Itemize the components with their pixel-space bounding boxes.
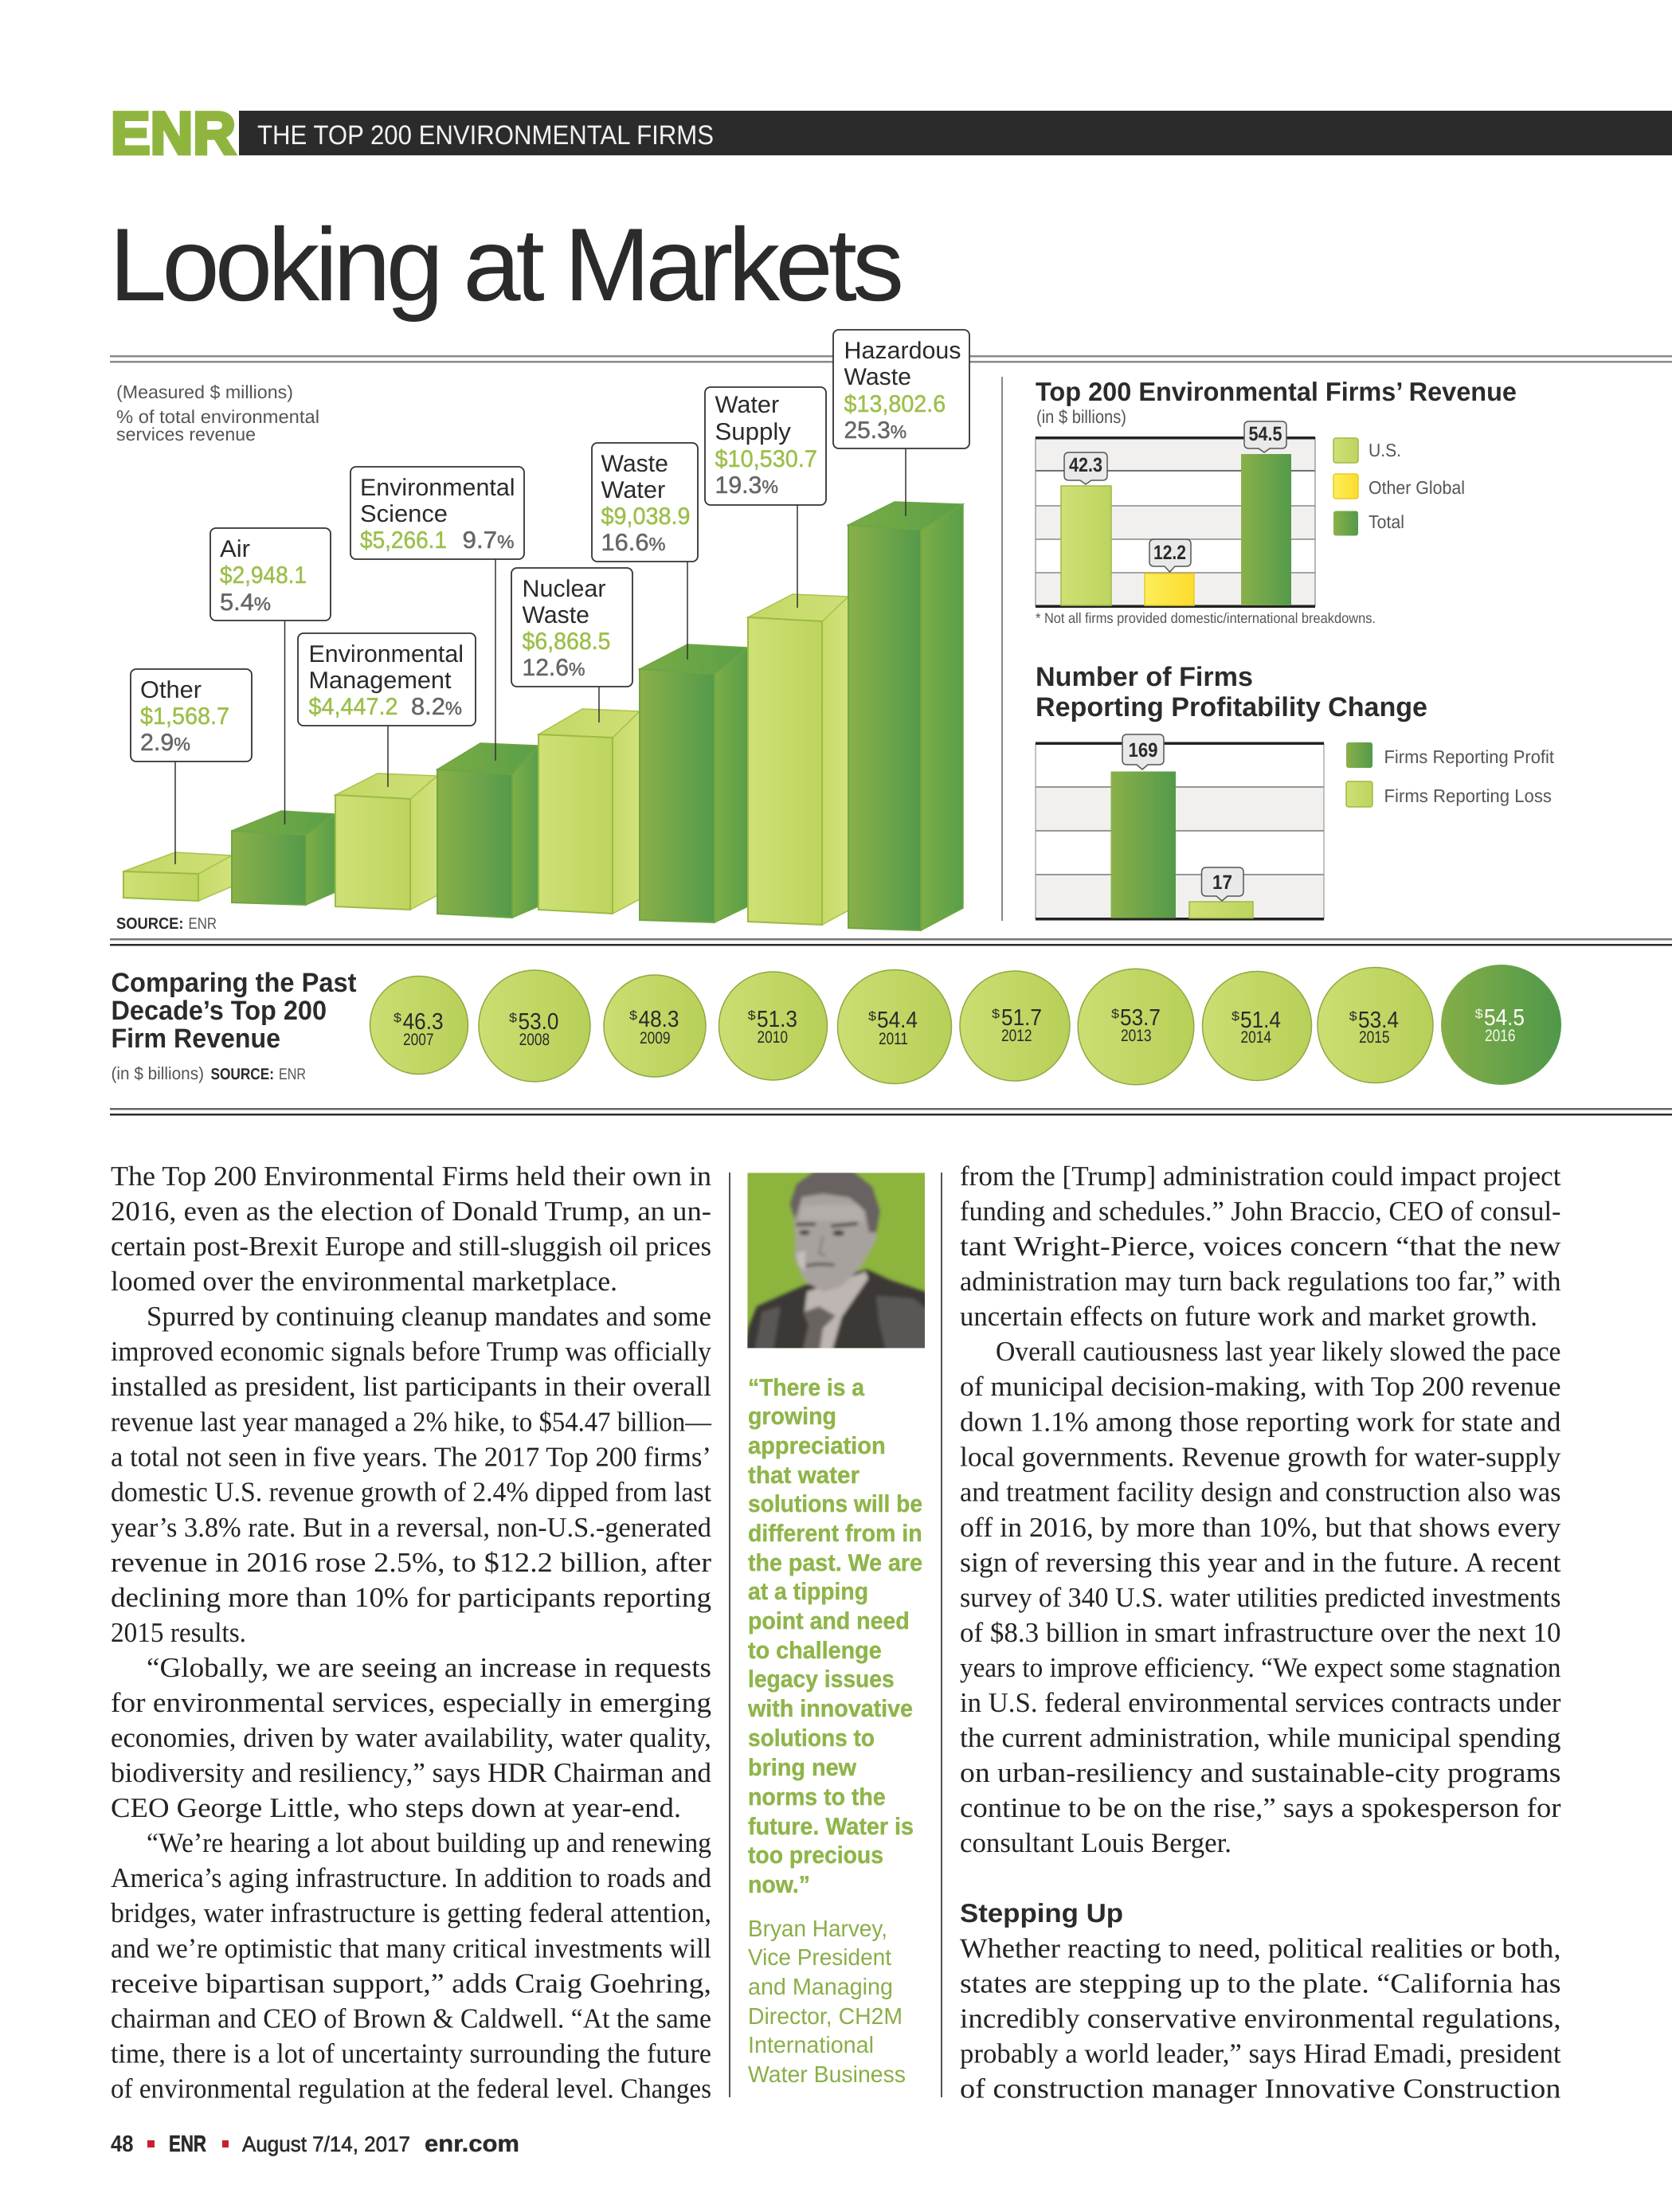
article column 3: probably a world leader,” says Hirad Emadi, president [960, 2038, 1561, 2069]
article column 1: revenue in 2016 rose 2.5%, to $12.2 billion, after [111, 1547, 711, 1578]
circle: 2012: 51.7 [1001, 1005, 1042, 1031]
circle: 2013: 2013 [1121, 1027, 1152, 1045]
callout: Nuclear Waste: Waste [523, 602, 589, 628]
bar: U.S. 42.3 [1061, 452, 1111, 605]
article column 3: off in 2016, by more than 10%, but that shows every [960, 1512, 1561, 1543]
circle: 2011 [838, 970, 951, 1083]
callout: Water Supply: Water [715, 392, 779, 418]
callout: Environmental Management: 8.2% [411, 694, 462, 720]
callout: Environmental Management: Environmental [309, 641, 464, 668]
circle: 2010: $ [748, 1009, 756, 1023]
portrait photo [743, 1171, 930, 1354]
circle: 2014 [1203, 972, 1311, 1080]
circle: 2009: 48.3 [639, 1007, 679, 1032]
article column 3: in U.S. federal environmental services contracts under [960, 1687, 1561, 1718]
callout: Waste Water: $9,038.9 [601, 503, 690, 530]
callout: Nuclear Waste: $6,868.5 [523, 628, 610, 655]
legend: profitability: Firms Reporting Loss [1384, 785, 1552, 806]
callout: Water Supply: 19.3% [715, 472, 778, 499]
callout: Hazardous Waste [833, 330, 969, 516]
pull quote: too precious [748, 1842, 883, 1869]
chart grid [1036, 437, 1315, 608]
callout: Other: Other [140, 677, 202, 703]
note: measurement units [116, 382, 319, 444]
heading: decade revenue: Firm Revenue [112, 1024, 280, 1054]
bar: profit 169: 169 [1128, 739, 1158, 761]
circle: 2015: 2015 [1359, 1028, 1389, 1047]
heading: profitability: Reporting Profitability Change [1036, 692, 1427, 722]
circle: 2007: 46.3 [403, 1009, 444, 1035]
article column 1: domestic U.S. revenue growth of 2.4% dipped from last [111, 1477, 711, 1507]
circle: 2011: 54.4 [877, 1008, 918, 1033]
article column 3: tant Wright-Pierce, voices concern “that the new [960, 1231, 1561, 1262]
quote attribution: Director, CH2M [748, 2004, 903, 2030]
legend: profitability [1346, 742, 1555, 807]
bar: loss 17 [1189, 867, 1253, 918]
circle: 2010: 51.3 [757, 1007, 797, 1032]
article column 3: continue to be on the rise,” says a spokesperson for [960, 1792, 1561, 1823]
panel: revenue chart [1036, 377, 1517, 626]
callout: Air: $2,948.1 [220, 562, 307, 589]
bar: Environmental Management [335, 773, 437, 910]
callout: Water Supply: Supply [715, 419, 791, 445]
pull quote: legacy issues [748, 1666, 895, 1693]
article column 1: receive bipartisan support,” adds Craig Goehring, [111, 1967, 711, 1999]
quote attribution: and Managing [748, 1975, 893, 2000]
callout: Environmental Management: $4,447.2 [309, 694, 398, 720]
article column 1: 2016, even as the election of Donald Trump, an un- [111, 1196, 711, 1227]
circle: 2014: 2014 [1241, 1028, 1271, 1047]
callout: Air [210, 528, 331, 824]
article column 1: loomed over the environmental marketplace. [111, 1266, 617, 1297]
callout: Hazardous Waste: Waste [844, 364, 911, 390]
circle: 2011: $ [868, 1010, 876, 1024]
quote attribution: Water Business [748, 2062, 906, 2088]
article column 3: on urban-resiliency and sustainable-city programs [960, 1757, 1561, 1788]
article column 1: of environmental regulation at the federal level. Changes [111, 2073, 711, 2104]
article column 1: year’s 3.8% rate. But in a reversal, non-U.S.-generated [111, 1512, 711, 1543]
callout: Nuclear Waste: Nuclear [523, 576, 606, 602]
legend: revenue: U.S. [1369, 440, 1401, 460]
note: measurement units: % of total environmental [116, 406, 319, 427]
circle: 2016 [1441, 965, 1561, 1085]
callout: Other: $1,568.7 [140, 703, 229, 730]
bar: U.S. 42.3: 42.3 [1069, 454, 1102, 476]
legend: revenue [1333, 438, 1465, 535]
article column 1: “We’re hearing a lot about building up and renewing [147, 1827, 711, 1858]
article column 1: 2015 results. [111, 1617, 246, 1648]
article column 1: economies, driven by water availability, water quality, [111, 1722, 711, 1753]
quote attribution [748, 1916, 906, 2088]
article column 3: incredibly conservative environmental regulations, [960, 2003, 1561, 2034]
pull quote: the past. We are [748, 1550, 922, 1576]
note: decade units and source: (in $ billions) [112, 1063, 204, 1083]
circle: 2013: $ [1111, 1008, 1119, 1021]
subheading: units: (in $ billions) [1036, 406, 1126, 427]
callout: Environmental Science: $5,266.1 [360, 527, 447, 554]
callout: Environmental Management: Management [309, 668, 452, 694]
article column 1: and we’re optimistic that many critical investments will [111, 1932, 711, 1964]
footer: ENR [169, 2132, 206, 2157]
callout: Other [131, 669, 252, 864]
callout: Waste Water: Waste [601, 451, 668, 477]
article column 1 [111, 1161, 712, 2104]
footnote: * Not all firms provided domestic/international breakdowns. [1036, 610, 1376, 626]
article column 1: revenue last year managed a 2% hike, to $54.47 billion— [111, 1407, 712, 1437]
article column 1: improved economic signals before Trump was officially [111, 1336, 711, 1367]
callout: Waste Water: Water [601, 477, 665, 503]
quote attribution: Vice President [748, 1945, 891, 1971]
circle: 2015: 53.4 [1358, 1008, 1399, 1033]
note: decade units and source [112, 1063, 306, 1083]
note: measurement units: (Measured $ millions) [116, 382, 293, 402]
note: measurement units: services revenue [116, 424, 256, 444]
3D bar chart: market share [123, 502, 963, 930]
pull quote: appreciation [748, 1433, 886, 1459]
article column 3: local governments. Revenue growth for water-supply [960, 1442, 1561, 1472]
article column 1: bridges, water infrastructure is getting federal attention, [111, 1897, 711, 1928]
article column 1: The Top 200 Environmental Firms held their own in [111, 1161, 711, 1192]
article column 3: administration may turn back regulations too far,” with [960, 1266, 1561, 1297]
heading: decade revenue: Decade’s Top 200 [112, 996, 327, 1026]
callout: Environmental Management [298, 633, 476, 787]
article column 3: Overall cautiousness last year likely slowed the pace [996, 1336, 1561, 1367]
circle: 2015 [1318, 967, 1433, 1083]
article column 3: down 1.1% among those reporting work for state and [960, 1407, 1561, 1437]
quote attribution: International [748, 2033, 874, 2058]
article column 3: of construction manager Innovative Construction [960, 2073, 1561, 2104]
pull quote: solutions to [748, 1725, 875, 1752]
bar: Waste Water [640, 644, 748, 922]
article column 1: certain post-Brexit Europe and still-sluggish oil prices [111, 1231, 711, 1262]
pull quote: bring new [748, 1755, 857, 1781]
callout: Hazardous Waste: Hazardous [844, 338, 961, 364]
circle: 2013 [1078, 969, 1194, 1085]
pull quote: point and need [748, 1608, 910, 1635]
article column 1: installed as president, list participants in their overall [111, 1371, 711, 1402]
callout: Environmental Science: 9.7% [462, 527, 515, 554]
article column 1: biodiversity and resiliency,” says HDR Chairman and [111, 1757, 712, 1788]
footer: August 7/14, 2017 [242, 2132, 410, 2156]
pull quote: to challenge [748, 1638, 882, 1664]
callout: Waste Water [592, 443, 698, 660]
heading: decade revenue: Comparing the Past [112, 968, 357, 998]
circle: 2012 [960, 971, 1070, 1081]
heading: decade revenue [112, 968, 357, 1054]
article column 1: CEO George Little, who steps down at year-end. [111, 1792, 681, 1823]
footer: 48 [111, 2132, 134, 2157]
callout: Water Supply [705, 387, 826, 608]
circle: 2009: 2009 [640, 1029, 671, 1047]
callout: Nuclear Waste: 12.6% [523, 655, 585, 681]
article column 3 [960, 1161, 1561, 2104]
circle: 2016: 2016 [1485, 1027, 1515, 1045]
pull quote: at a tipping [748, 1579, 868, 1605]
circle: 2007: $ [394, 1012, 401, 1025]
bar: profit 169 [1110, 734, 1176, 918]
article column 3: uncertain effects on future work and market growth. [960, 1301, 1537, 1332]
bar: Environmental Science [437, 743, 538, 918]
bar: Nuclear Waste [538, 709, 640, 914]
article column 3: states are stepping up to the plate. “California has [960, 1967, 1561, 1999]
article column 3: and treatment facility design and construction also was [960, 1477, 1561, 1507]
source note: SOURCE: [116, 915, 183, 933]
bar: Other Global 12.2: 12.2 [1153, 542, 1186, 564]
circle: 2014: 51.4 [1240, 1008, 1281, 1033]
article column 3: funding and schedules.” John Braccio, CEO of consul- [960, 1196, 1561, 1227]
article column 3: of municipal decision-making, with Top 200 revenue [960, 1371, 1561, 1402]
article column 1: chairman and CEO of Brown & Caldwell. “At the same [111, 2003, 711, 2034]
heading: profitability [1036, 662, 1427, 722]
heading: revenue: Top 200 Environmental Firms’ Revenue [1036, 377, 1517, 406]
subheading: Stepping Up: Stepping Up [960, 1898, 1123, 1928]
callout: Other: 2.9% [140, 730, 190, 756]
pull quote: future. Water is [748, 1814, 914, 1840]
circle: 2007 [370, 977, 468, 1074]
article column 3: years to improve efficiency. “We expect some stagnation [960, 1652, 1561, 1683]
pull quote: that water [748, 1462, 859, 1489]
article column 3: survey of 340 U.S. water utilities predicted investments [960, 1582, 1561, 1613]
bar: Hazardous Waste [848, 502, 963, 930]
circle: 2010 [719, 972, 827, 1080]
pull quote: with innovative [747, 1696, 913, 1722]
legend: revenue: Total [1369, 511, 1404, 532]
bar: Other Global 12.2 [1145, 539, 1194, 605]
article column 3: Whether reacting to need, political realities or both, [960, 1932, 1561, 1964]
circle: 2010: 2010 [757, 1028, 788, 1047]
circle: 2016: $ [1475, 1008, 1483, 1021]
bar: Other [123, 852, 232, 901]
title: Looking at Markets [109, 206, 904, 323]
bar: Total 54.5 [1241, 421, 1291, 605]
callout: Air: Air [220, 536, 250, 562]
article column 1: “Globally, we are seeing an increase in requests [147, 1652, 711, 1683]
article column 3: from the [Trump] administration could impact project [960, 1161, 1561, 1192]
callout: Waste Water: 16.6% [601, 530, 666, 556]
circle: 2012: $ [992, 1008, 1000, 1021]
callout: Nuclear Waste [511, 568, 632, 722]
callout: Hazardous Waste: $13,802.6 [844, 391, 946, 417]
quote attribution: Bryan Harvey, [748, 1916, 887, 1942]
article column 3: sign of reversing this year and in the future. A recent [960, 1547, 1561, 1578]
circle: 2007: 2007 [403, 1031, 433, 1049]
circle: 2011: 2011 [879, 1030, 908, 1048]
circle: 2014: $ [1231, 1010, 1239, 1024]
bar: loss 17: 17 [1212, 871, 1232, 894]
callout: Environmental Science: Environmental [360, 475, 515, 501]
article column 1: Spurred by continuing cleanup mandates and some [147, 1301, 711, 1332]
callout: Environmental Science: Science [360, 501, 448, 527]
circle: 2013: 53.7 [1120, 1005, 1161, 1031]
pull quote: now.” [748, 1872, 810, 1898]
panel: decade revenue [112, 965, 1561, 1085]
pull quote: norms to the [748, 1784, 886, 1811]
source note: ENR [188, 915, 217, 933]
circle: 2008 [479, 970, 590, 1082]
heading: profitability: Number of Firms [1036, 662, 1253, 692]
pull quote: different from in [748, 1521, 922, 1547]
footer [111, 2132, 519, 2157]
callout: Hazardous Waste: 25.3% [844, 417, 906, 444]
ENR logo: ENR [111, 100, 236, 166]
pull quote: growing [748, 1404, 836, 1430]
panel: profitability chart [1036, 662, 1555, 921]
note: decade units and source: ENR [279, 1066, 306, 1083]
article column 3: the current administration, while municipal spending [960, 1722, 1561, 1753]
pull quote [747, 1375, 922, 1898]
header bar [111, 100, 1672, 166]
bar: Total 54.5: 54.5 [1249, 423, 1282, 445]
article column 1: time, there is a lot of uncertainty surrounding the future [111, 2038, 711, 2069]
article column 1: declining more than 10% for participants reporting [111, 1582, 711, 1613]
circle: 2008: 53.0 [518, 1009, 559, 1035]
note: decade units and source: SOURCE: [210, 1066, 274, 1083]
circle: 2016: 54.5 [1484, 1005, 1525, 1031]
callout: Environmental Science [350, 467, 524, 761]
article column 3: consultant Louis Berger. [960, 1827, 1231, 1858]
article column 1: America’s aging infrastructure. In addition to roads and [111, 1862, 711, 1893]
section label: THE TOP 200 ENVIRONMENTAL FIRMS [257, 120, 714, 151]
circle: 2009 [604, 975, 706, 1077]
bar: Water Supply [748, 594, 848, 925]
chart grid [1036, 742, 1324, 921]
legend: revenue: Other Global [1369, 477, 1465, 498]
circle: 2008: 2008 [519, 1031, 550, 1049]
circle: 2008: $ [509, 1012, 517, 1025]
pull quote: solutions will be [748, 1491, 922, 1517]
header band [239, 111, 1672, 155]
pull quote: “There is a [748, 1375, 864, 1401]
article column 1: a total not seen in five years. The 2017 Top 200 firms’ [111, 1442, 711, 1472]
circle: 2012: 2012 [1001, 1027, 1032, 1045]
callout: Water Supply: $10,530.7 [715, 446, 817, 472]
circle: 2009: $ [629, 1009, 637, 1023]
footer: enr.com [425, 2132, 519, 2157]
article column 1: for environmental services, especially in emerging [111, 1687, 711, 1718]
legend: profitability: Firms Reporting Profit [1384, 746, 1555, 767]
circle: 2015: $ [1349, 1010, 1357, 1024]
bar: Air [232, 811, 335, 905]
article column 3: of $8.3 billion in smart infrastructure over the next 10 [960, 1617, 1561, 1648]
callout: Air: 5.4% [220, 589, 271, 616]
